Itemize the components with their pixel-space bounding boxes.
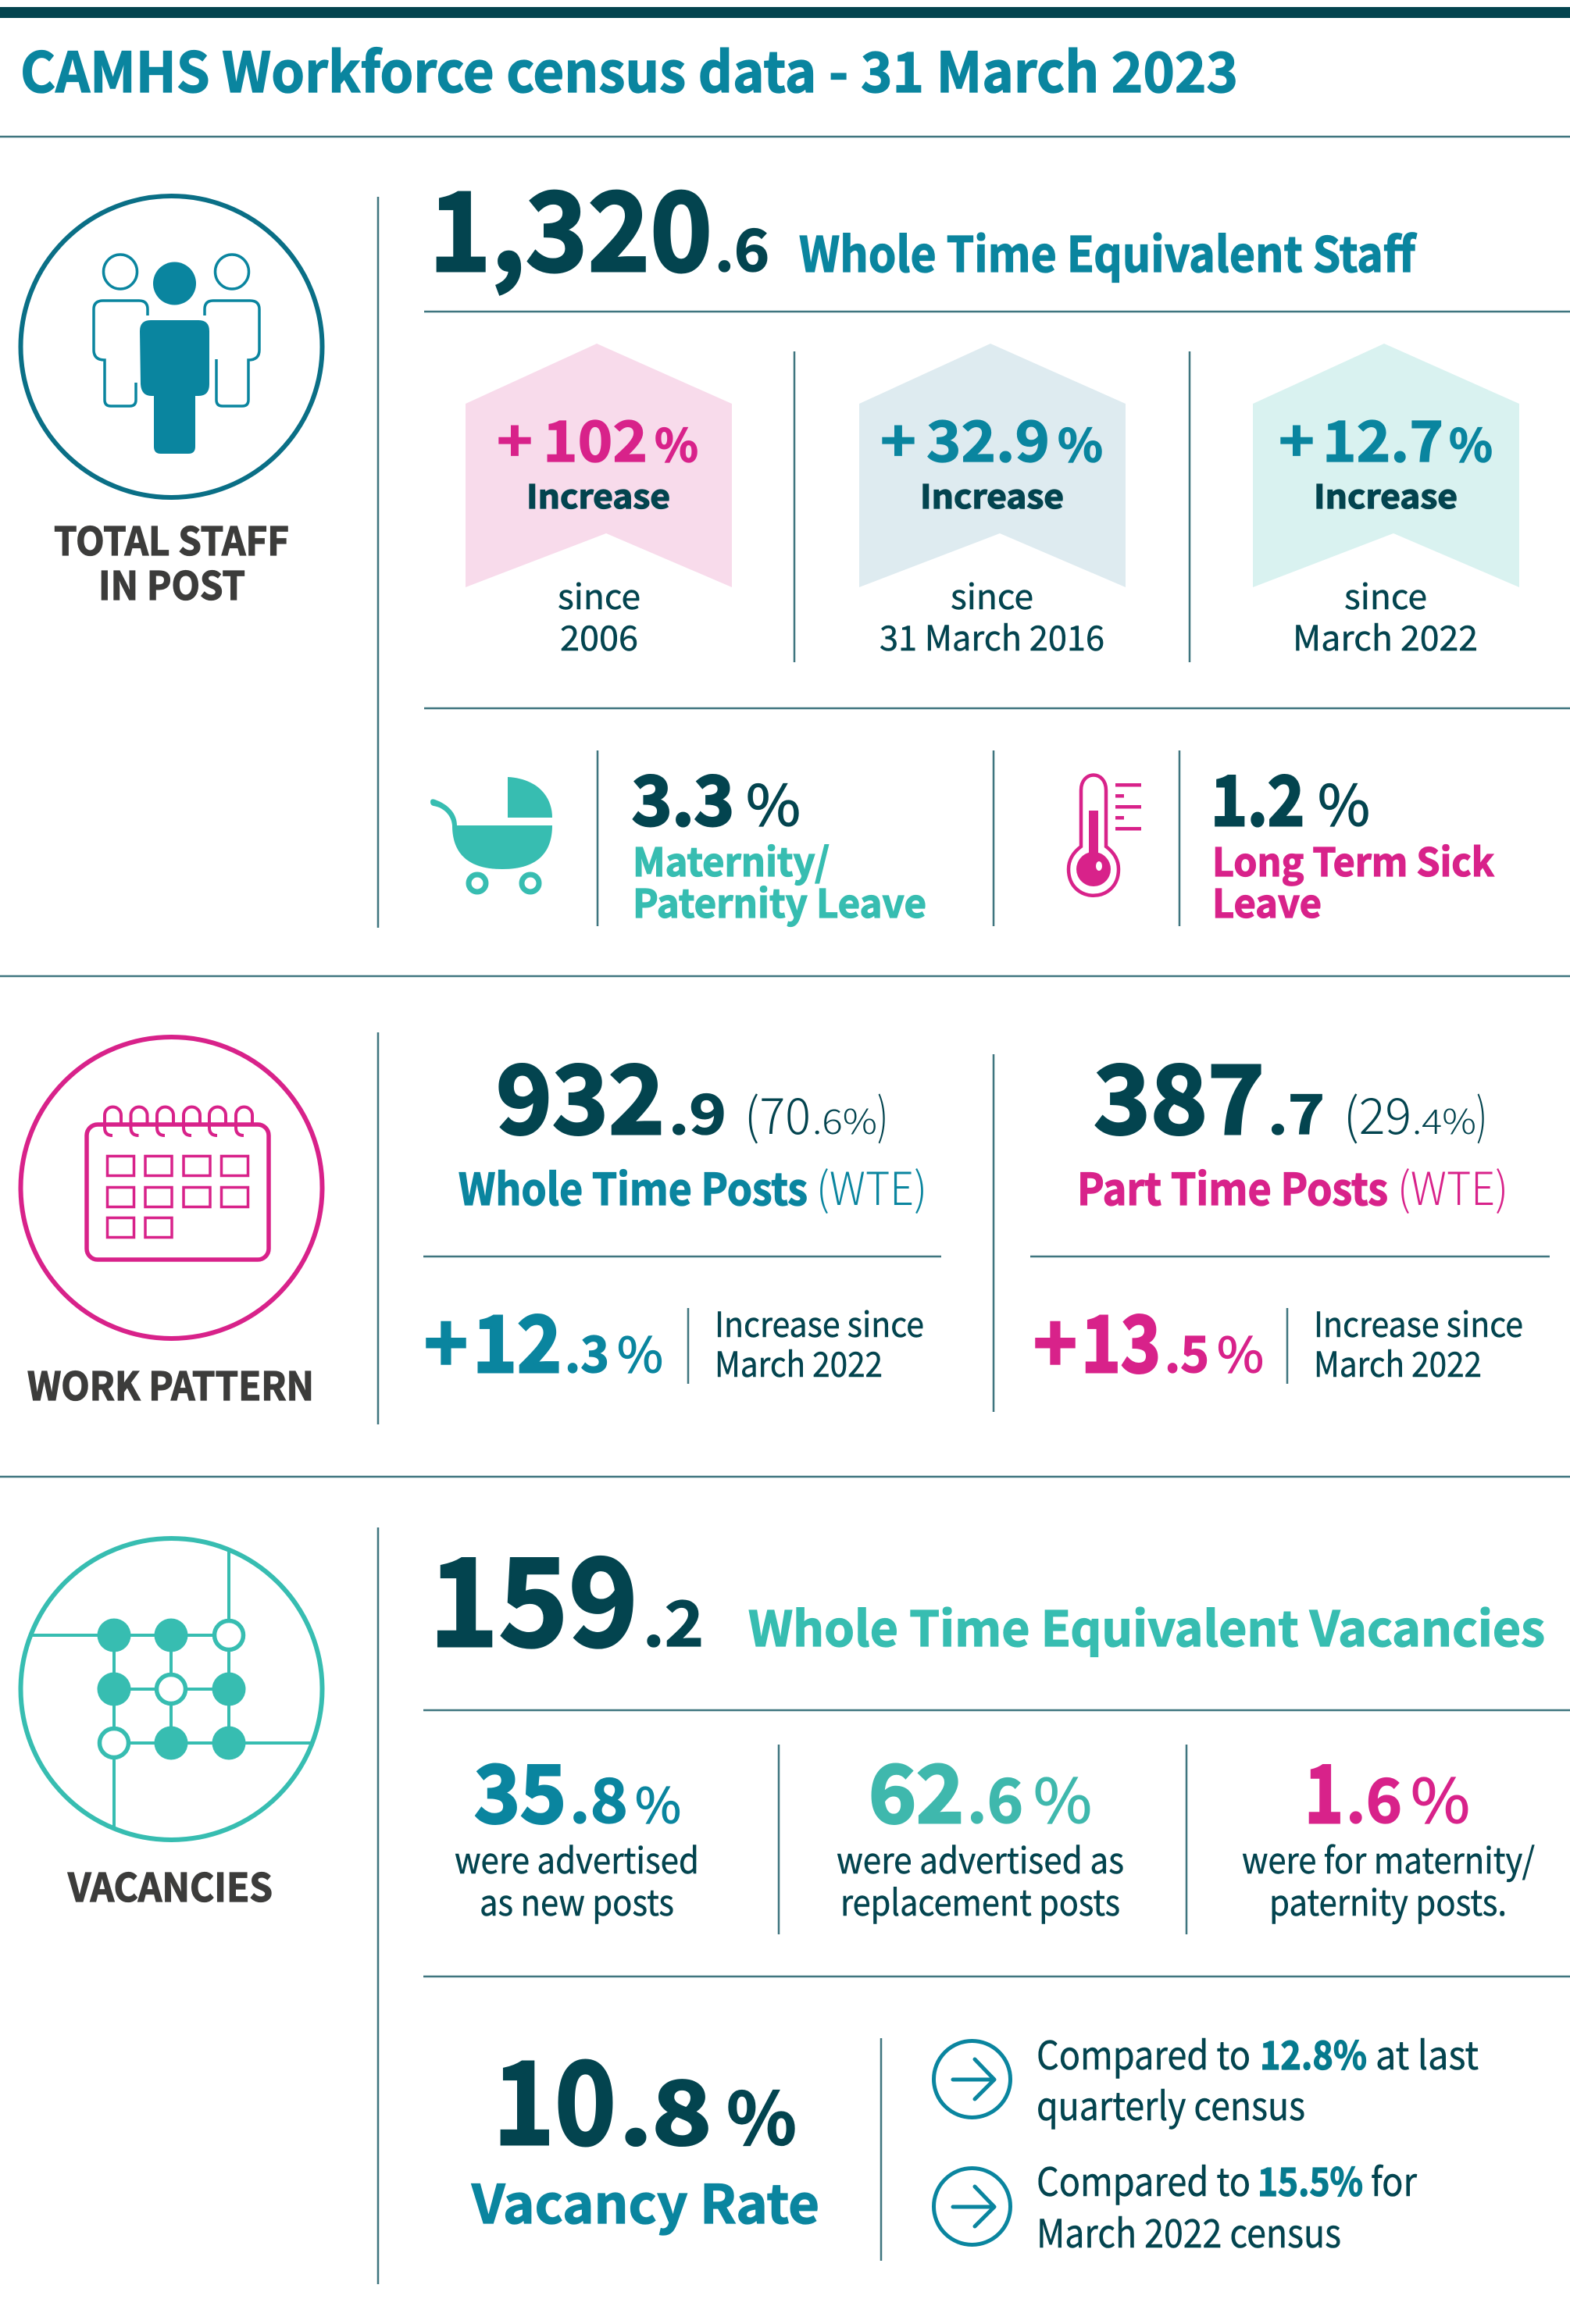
stat: whole time posts 932.9 — [459, 1024, 927, 1218]
stat: 10.8% vacancy rate: % — [726, 2062, 797, 2165]
headline: 159.2 whole time equivalent vacancies — [429, 1505, 1545, 1681]
stat: 10.8% vacancy rate: .8 — [619, 2044, 712, 2170]
comparison: 12.8% last quarterly census — [1037, 2025, 1479, 2132]
stat: whole time posts 932.9: 932 — [496, 1024, 665, 1162]
stat: 1.6% for maternity paternity posts — [1242, 1731, 1535, 1927]
stat: part time posts 387.7: ) — [1476, 1077, 1487, 1149]
stat: maternity paternity leave 3.3%: % — [746, 760, 801, 842]
comparison: 12.8% last quarterly census: Compared to — [1037, 2025, 1251, 2081]
stat: +13.5% increase since March 2022 — [1033, 1281, 1523, 1395]
badge: +12.7% since March 2022: % — [1449, 409, 1493, 475]
badge: +102% since 2006: 2006 — [560, 611, 638, 661]
icon: thermometer — [1069, 775, 1141, 896]
badge: +12.7% since March 2022: Increase — [1314, 471, 1458, 519]
comparison: 15.5% March 2022 census: March 2022 census — [1037, 2203, 1341, 2259]
stat: part time posts 387.7: .7 — [1268, 1071, 1325, 1150]
headline: 1,320.6 whole time equivalent staff: Whole Time Equivalent Staff — [799, 216, 1417, 286]
stat: +13.5% increase since March 2022: March 2022 — [1314, 1337, 1482, 1387]
stat: long term sick leave 1.2%: 1.2 — [1211, 747, 1304, 846]
badge: +12.7% since March 2022 — [1253, 344, 1519, 661]
icon: arrow in circle — [934, 2168, 1011, 2244]
section label: total staff in post: TOTAL STAFF — [54, 511, 289, 567]
stat: 35.8% advertised as new posts: as new posts — [480, 1875, 674, 1927]
headline: 1,320.6 whole time equivalent staff — [429, 145, 1417, 303]
comparison: 15.5% March 2022 census: 15.5% — [1258, 2151, 1363, 2208]
badge: +102% since 2006: Increase — [526, 471, 670, 519]
stat: part time posts 387.7: (29 — [1343, 1077, 1411, 1149]
stat: long term sick leave 1.2%: % — [1318, 760, 1370, 842]
stat: 1.6% for maternity paternity posts: .6 — [1346, 1753, 1402, 1841]
badge: +12.7% since March 2022: since — [1344, 569, 1427, 619]
stat: 62.6% advertised as replacement posts: % — [1033, 1753, 1092, 1841]
stat: maternity paternity leave 3.3% — [632, 747, 926, 929]
title: CAMHS Workforce census data - 31 March 2023 — [20, 29, 1238, 109]
stat: +12.3% increase since March 2022: Increase since — [715, 1297, 924, 1347]
stat: 62.6% advertised as replacement posts: were advertised as — [837, 1833, 1124, 1884]
stat: 35.8% advertised as new posts: .8 — [569, 1753, 628, 1841]
stat: +12.3% increase since March 2022: 12 — [473, 1281, 562, 1395]
stat: 10.8% vacancy rate: Vacancy Rate — [471, 2162, 819, 2239]
section label: vacancies: VACANCIES — [67, 1857, 273, 1913]
stat: long term sick leave 1.2%: Long Term Sick — [1212, 832, 1494, 888]
badge: +32.9% since 31 March 2016: % — [1058, 409, 1103, 475]
stat: +12.3% increase since March 2022: .3 — [565, 1315, 609, 1387]
stat: 35.8% advertised as new posts — [455, 1731, 699, 1927]
stat: maternity paternity leave 3.3%: 3.3 — [632, 747, 734, 846]
badge: +32.9% since 31 March 2016: 32.9 — [926, 396, 1050, 478]
headline: 1,320.6 whole time equivalent staff: 1,320 — [429, 145, 712, 303]
stat: 1.6% for maternity paternity posts: were for maternity/ — [1242, 1833, 1535, 1884]
comparison: 15.5% March 2022 census — [1037, 2151, 1418, 2259]
stat: maternity paternity leave 3.3%: Maternity/ — [633, 832, 830, 888]
badge: +102% since 2006: + — [497, 396, 533, 478]
stat: 62.6% advertised as replacement posts: 62 — [869, 1731, 964, 1846]
stat: +12.3% increase since March 2022: % — [617, 1316, 663, 1386]
stat: 35.8% advertised as new posts: were advertised — [455, 1833, 699, 1884]
comparison: 12.8% last quarterly census: 12.8% — [1260, 2025, 1367, 2081]
stat: part time posts 387.7: Part Time Posts — [1077, 1155, 1388, 1218]
stat: part time posts 387.7: .4% — [1412, 1094, 1476, 1144]
stat: 62.6% advertised as replacement posts: .6 — [967, 1753, 1023, 1841]
badge: +102% since 2006: since — [558, 569, 640, 619]
stat: part time posts 387.7: (WTE) — [1397, 1153, 1508, 1218]
stat: +12.3% increase since March 2022: March 2022 — [715, 1337, 883, 1387]
headline: 159.2 whole time equivalent vacancies: 159 — [429, 1505, 638, 1681]
stat: +13.5% increase since March 2022: % — [1217, 1316, 1264, 1386]
stat: maternity paternity leave 3.3%: Paternity Leave — [633, 873, 926, 929]
comparison: 15.5% March 2022 census: Compared to — [1037, 2151, 1251, 2208]
stat: whole time posts 932.9: (WTE) — [816, 1153, 927, 1218]
section label: total staff in post: IN POST — [98, 555, 245, 611]
badge: +102% since 2006: 102 — [543, 396, 648, 478]
icon: node network — [20, 1538, 322, 1840]
badge: +32.9% since 31 March 2016 — [859, 344, 1126, 661]
stat: 1.6% for maternity paternity posts: paternity posts. — [1269, 1875, 1507, 1927]
stat: +13.5% increase since March 2022: 13 — [1081, 1281, 1161, 1395]
stat: 1.6% for maternity paternity posts: % — [1411, 1753, 1470, 1841]
stat: 10.8% vacancy rate: 10 — [493, 2012, 616, 2178]
section label: work pattern: WORK PATTERN — [27, 1356, 314, 1412]
stat: long term sick leave 1.2%: Leave — [1212, 873, 1322, 929]
icon: arrow in circle — [934, 2041, 1011, 2118]
stat: +12.3% increase since March 2022 — [424, 1281, 924, 1395]
stat: +13.5% increase since March 2022: + — [1033, 1281, 1077, 1395]
badge: +12.7% since March 2022: + — [1279, 396, 1315, 478]
stat: 10.8% vacancy rate — [471, 2012, 819, 2239]
stat: whole time posts 932.9: .6% — [812, 1094, 877, 1144]
badge: +32.9% since 31 March 2016: 31 March 2016 — [880, 611, 1104, 661]
stat: 62.6% advertised as replacement posts — [837, 1731, 1124, 1927]
headline: 1,320.6 whole time equivalent staff: .6 — [715, 205, 769, 288]
comparison: 12.8% last quarterly census: at last — [1376, 2025, 1479, 2081]
section label: total staff in post — [54, 511, 289, 611]
badge: +102% since 2006 — [466, 344, 732, 661]
panel: vacancies — [20, 1505, 1570, 2284]
stat: whole time posts 932.9: .9 — [669, 1071, 726, 1150]
stat: 35.8% advertised as new posts: % — [635, 1766, 681, 1837]
stat: part time posts 387.7: 387 — [1094, 1024, 1265, 1162]
headline: 159.2 whole time equivalent vacancies: Whole Time Equivalent Vacancies — [748, 1590, 1545, 1660]
comparison: 15.5% March 2022 census: for — [1371, 2151, 1418, 2208]
badge: +12.7% since March 2022: 12.7 — [1322, 396, 1443, 478]
stat: +13.5% increase since March 2022: .5 — [1165, 1315, 1209, 1387]
icon: calendar — [20, 1037, 322, 1338]
comparison: 12.8% last quarterly census: quarterly census — [1037, 2076, 1305, 2132]
badge: +102% since 2006: % — [655, 409, 698, 475]
panel: work pattern — [20, 1024, 1550, 1424]
stat: part time posts 387.7 — [1077, 1024, 1508, 1218]
panel: total staff in post — [20, 145, 1570, 929]
stat: 62.6% advertised as replacement posts: replacement posts — [840, 1875, 1120, 1927]
icon: group of staff — [20, 196, 322, 497]
stat: 35.8% advertised as new posts: 35 — [474, 1731, 566, 1846]
stat: +13.5% increase since March 2022: Increase since — [1314, 1297, 1523, 1347]
stat: 1.6% for maternity paternity posts: 1 — [1304, 1731, 1343, 1846]
icon: pram — [430, 777, 552, 892]
stat: long term sick leave 1.2% — [1211, 747, 1494, 929]
stat: +12.3% increase since March 2022: + — [424, 1281, 468, 1395]
headline: 159.2 whole time equivalent vacancies: .2 — [643, 1574, 704, 1665]
badge: +32.9% since 31 March 2016: since — [951, 569, 1033, 619]
badge: +32.9% since 31 March 2016: Increase — [920, 471, 1064, 519]
badge: +32.9% since 31 March 2016: + — [880, 396, 916, 478]
stat: whole time posts 932.9: Whole Time Posts — [459, 1155, 808, 1218]
stat: whole time posts 932.9: (70 — [744, 1077, 811, 1149]
badge: +12.7% since March 2022: March 2022 — [1293, 611, 1478, 661]
stat: whole time posts 932.9: ) — [877, 1077, 888, 1149]
